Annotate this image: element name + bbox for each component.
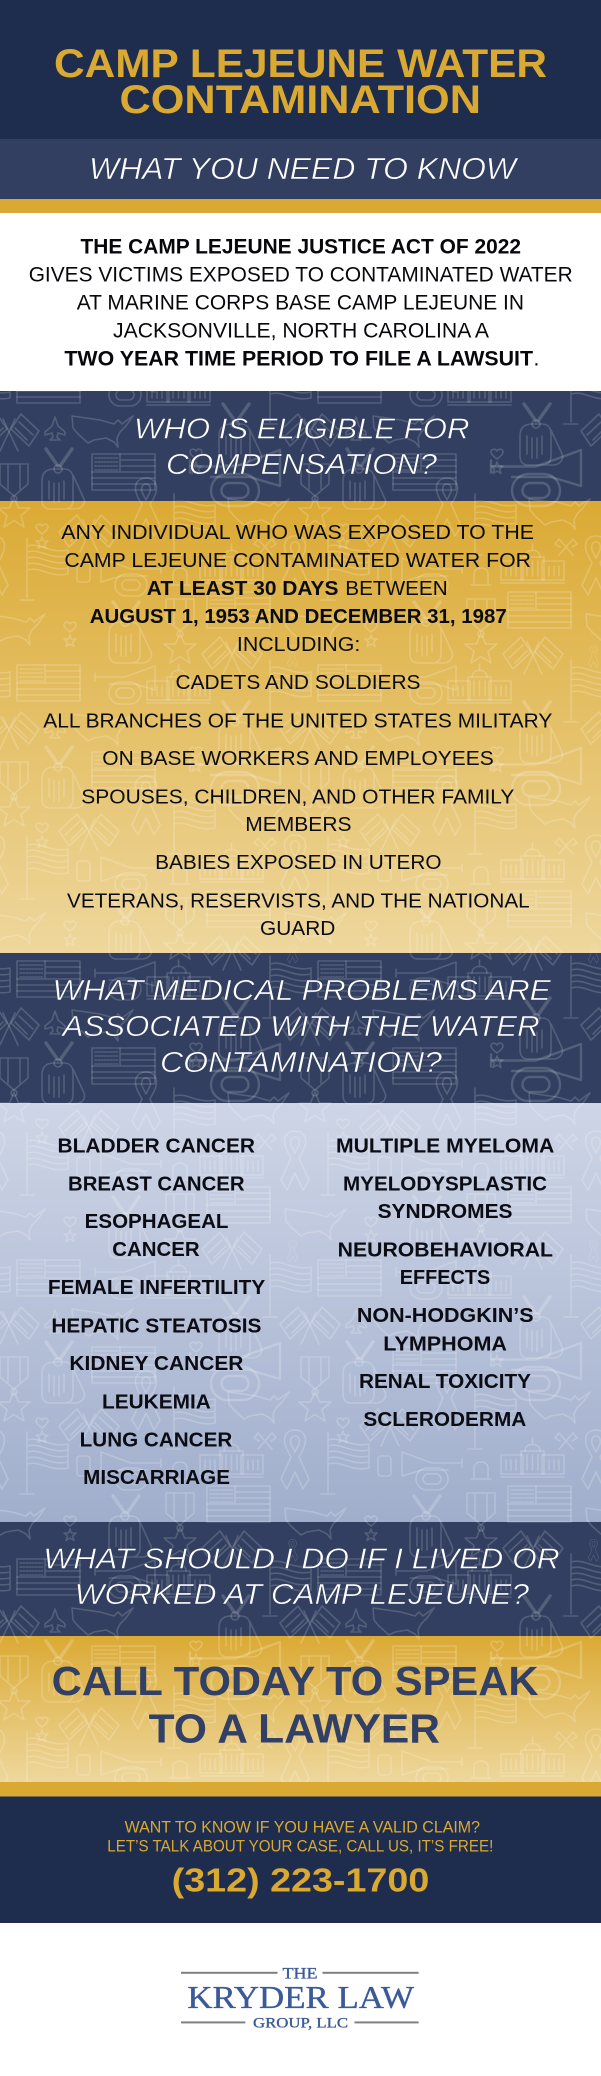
- conditions list: right column: SYNDROMES: [378, 1200, 512, 1223]
- call to action heading: TO A LAWYER: [149, 1706, 440, 1752]
- intro paragraph: THE CAMP LEJEUNE JUSTICE ACT OF 2022: [80, 235, 521, 258]
- conditions list: right column: EFFECTS: [400, 1266, 490, 1289]
- eligibility intro text: AT LEAST 30 DAYS: [147, 577, 338, 600]
- conditions list: left column: MISCARRIAGE: [83, 1466, 230, 1489]
- background icon pattern: [0, 178, 601, 1125]
- conditions list: right column: MULTIPLE MYELOMA: [336, 1134, 555, 1158]
- panel: title header: [0, 0, 601, 139]
- conditions list: left column: CANCER: [112, 1238, 200, 1261]
- intro paragraph: TWO YEAR TIME PERIOD TO FILE A LAWSUIT: [64, 347, 533, 370]
- background icon pattern: [0, 773, 601, 1421]
- panel: medical problems heading: [0, 953, 601, 1103]
- eligible groups list: MEMBERS: [245, 813, 352, 836]
- title: [54, 42, 547, 122]
- heading: medical problems: WHAT MEDICAL PROBLEMS ARE: [52, 975, 552, 1007]
- conditions list: left column: FEMALE INFERTILITY: [48, 1276, 266, 1299]
- eligibility intro text: INCLUDING:: [237, 633, 360, 656]
- conditions list: right column: MYELODYSPLASTIC: [343, 1172, 547, 1195]
- eligible groups list: BABIES EXPOSED IN UTERO: [155, 851, 441, 874]
- heading: what should I do: WORKED AT CAMP LEJEUNE?: [75, 1579, 530, 1611]
- title: CAMP LEJEUNE WATER: [54, 42, 547, 86]
- heading: medical problems: [52, 975, 552, 1079]
- call to action heading: CALL TODAY TO SPEAK: [52, 1658, 539, 1704]
- heading: who is eligible: COMPENSATION?: [166, 449, 438, 481]
- logo: The Kryder Law Group: THE: [282, 1965, 318, 1982]
- eligible groups list: SPOUSES, CHILDREN, AND OTHER FAMILY: [81, 786, 515, 808]
- logo: The Kryder Law Group: [181, 1965, 419, 2032]
- contact text: LET’S TALK ABOUT YOUR CASE, CALL US, IT’S FREE!: [107, 1837, 493, 1855]
- heading: who is eligible: [134, 413, 470, 481]
- contact text: [107, 1818, 493, 1855]
- intro paragraph: JACKSONVILLE, NORTH CAROLINA A: [113, 319, 489, 342]
- eligibility intro text: AUGUST 1, 1953 AND DECEMBER 31, 1987: [90, 605, 507, 628]
- eligibility intro text: [61, 521, 534, 656]
- panel: eligibility list: [0, 501, 601, 953]
- gold divider bar: [0, 1782, 601, 1796]
- panel: subtitle band: [0, 139, 601, 199]
- panel: what should I do heading: [0, 1522, 601, 1636]
- heading: medical problems: CONTAMINATION?: [160, 1047, 443, 1079]
- subtitle: WHAT YOU NEED TO KNOW: [89, 151, 519, 186]
- heading: what should I do: WHAT SHOULD I DO IF I LIVED OR: [43, 1543, 560, 1575]
- conditions list: right column: SCLERODERMA: [363, 1408, 526, 1431]
- eligibility intro text: ANY INDIVIDUAL WHO WAS EXPOSED TO THE: [61, 521, 534, 544]
- phone number: (312) 223-1700: [172, 1862, 429, 1899]
- intro paragraph: .: [534, 347, 539, 370]
- eligibility intro text: CAMP LEJEUNE CONTAMINATED WATER FOR: [64, 549, 531, 572]
- conditions list: left column: HEPATIC STEATOSIS: [51, 1314, 261, 1337]
- eligible groups list: CADETS AND SOLDIERS: [176, 671, 420, 694]
- conditions list: right column: NEUROBEHAVIORAL: [338, 1238, 553, 1261]
- conditions list: left column: LUNG CANCER: [80, 1428, 232, 1451]
- conditions list: left column: [48, 1134, 266, 1489]
- conditions list: left column: LEUKEMIA: [102, 1390, 211, 1414]
- panel: intro text: [0, 213, 601, 391]
- conditions list: right column: RENAL TOXICITY: [359, 1370, 531, 1393]
- panel: call to action: [0, 1636, 601, 1782]
- eligible groups list: ON BASE WORKERS AND EMPLOYEES: [102, 747, 494, 770]
- conditions list: left column: BLADDER CANCER: [58, 1134, 255, 1158]
- intro paragraph: GIVES VICTIMS EXPOSED TO CONTAMINATED WATER: [29, 263, 573, 286]
- heading: who is eligible: WHO IS ELIGIBLE FOR: [134, 413, 470, 445]
- logo: The Kryder Law Group: KRYDER LAW: [187, 1979, 415, 2015]
- conditions list: right column: [336, 1134, 555, 1431]
- heading: what should I do: [43, 1543, 560, 1611]
- conditions list: right column: NON-HODGKIN’S: [357, 1304, 534, 1327]
- eligible groups list: GUARD: [260, 917, 335, 940]
- logo: The Kryder Law Group: GROUP, LLC: [253, 2016, 348, 2032]
- call to action heading: [52, 1658, 539, 1752]
- title: CONTAMINATION: [120, 78, 481, 122]
- background icon pattern: [0, 1636, 601, 1782]
- conditions list: left column: KIDNEY CANCER: [69, 1352, 244, 1375]
- panel: who is eligible heading: [0, 391, 601, 501]
- intro paragraph: [29, 235, 573, 370]
- conditions list: left column: BREAST CANCER: [68, 1172, 245, 1195]
- gold divider bar: [0, 199, 601, 213]
- panel: medical conditions: [0, 1103, 601, 1522]
- conditions list: right column: LYMPHOMA: [383, 1332, 507, 1355]
- eligible groups list: ALL BRANCHES OF THE UNITED STATES MILITARY: [43, 709, 553, 732]
- conditions list: left column: ESOPHAGEAL: [85, 1210, 228, 1233]
- background icon pattern: [0, 179, 601, 827]
- background icon pattern: [0, 1103, 601, 1644]
- panel: contact footer: [0, 1796, 601, 1923]
- background icon pattern: [0, 1522, 601, 1644]
- heading: medical problems: ASSOCIATED WITH THE WATER: [60, 1011, 540, 1043]
- contact text: WANT TO KNOW IF YOU HAVE A VALID CLAIM?: [125, 1818, 480, 1836]
- intro paragraph: AT MARINE CORPS BASE CAMP LEJEUNE IN: [77, 291, 524, 314]
- eligibility intro text: BETWEEN: [345, 577, 448, 600]
- eligible groups list: VETERANS, RESERVISTS, AND THE NATIONAL: [67, 890, 530, 913]
- eligible groups list: [43, 671, 553, 940]
